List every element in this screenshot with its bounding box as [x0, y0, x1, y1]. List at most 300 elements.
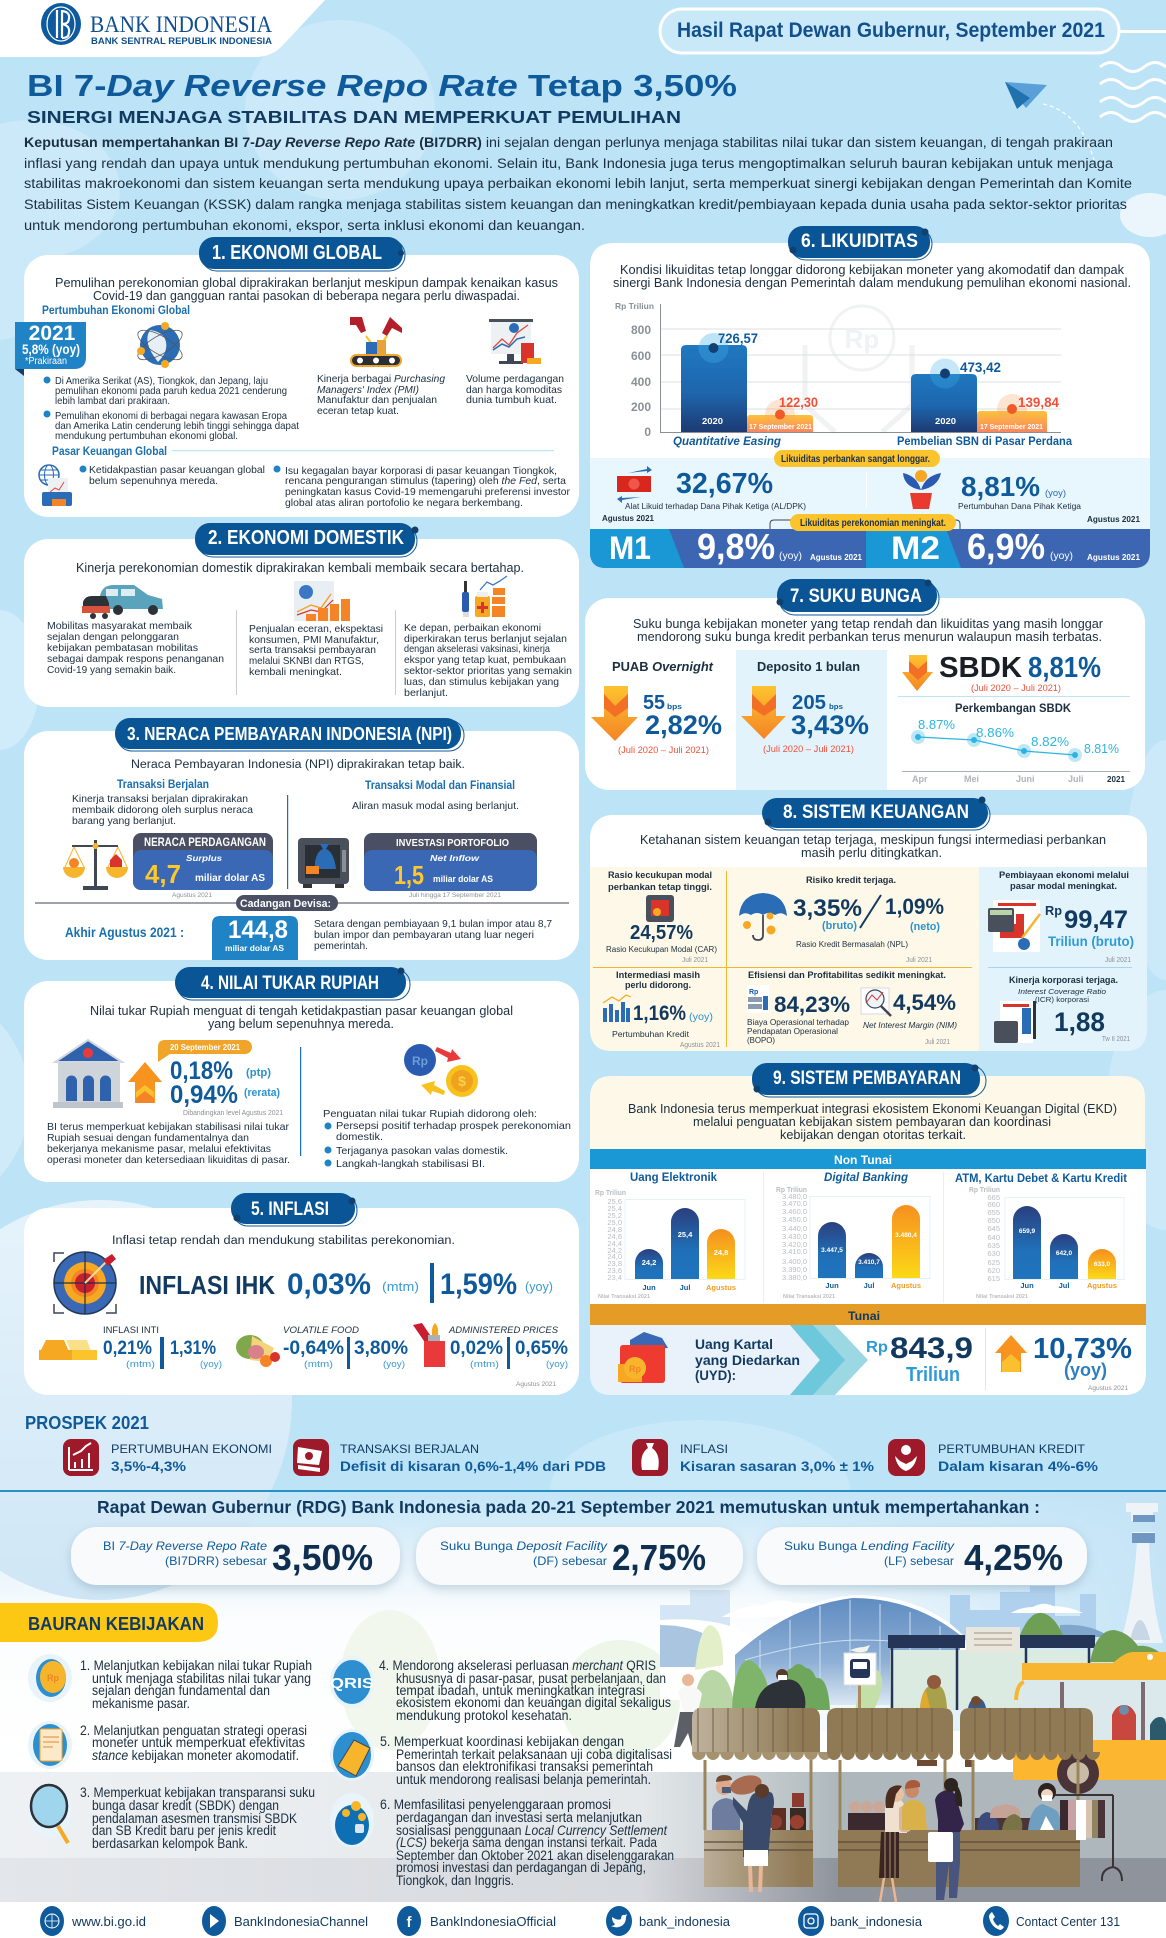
band: M1 M2: 9,8% — [697, 526, 775, 567]
text: stabilization: bekerjanya mekanisme pasar, melalui efektivitas — [47, 1143, 271, 1155]
text: intro NPI: Neraca Pembayaran Indonesia (NPI) diprakirakan tetap baik. — [131, 759, 465, 771]
line chart: SBDK: Mei — [964, 774, 979, 784]
stat: SBDK: (Juli 2020 – Juli 2021) — [971, 683, 1061, 694]
footer — [0, 1902, 1166, 1938]
policy 5: untuk mendorong realisasi belanja pemerintah. — [396, 1772, 651, 1787]
text: stabilization: operasi moneter dan ketersediaan likuiditas di pasar. — [47, 1154, 290, 1166]
card: Investasi Portofolio: Juli hingga 17 September 2021 — [409, 892, 501, 899]
band: Uang Kartal yang Diedarkan: yang Diedarkan — [695, 1353, 800, 1368]
policy 2: stance kebijakan moneter akomodatif. — [92, 1748, 299, 1763]
stat: NPL: Juli 2021 — [906, 957, 932, 964]
text: financial market bullet 2 — [274, 465, 570, 509]
card: Deposit Facility — [416, 1527, 743, 1585]
item: Pertumbuhan Ekonomi: 3,5%-4,3% — [111, 1458, 187, 1474]
text: intro interest rate: mendorong suku bunga kredit perbankan terus menurun walaupun masih terbatas. — [637, 630, 1102, 644]
icon: wallet — [618, 1332, 668, 1383]
band: M1 M2: (yoy) — [779, 550, 802, 562]
stat: 0,18% and 0,94%: Dibandingkan level Agustus 2021 — [183, 1110, 283, 1117]
policy 1: 1. Melanjutkan kebijakan nilai tukar Rupiah — [80, 1658, 312, 1673]
stat: Inflasi Inti: 0,21% — [103, 1338, 152, 1359]
column: Transaksi Modal dan Finansial: Transaksi Modal dan Finansial — [365, 780, 515, 792]
bar chart: Uang Elektronik: 24,2 — [642, 1258, 656, 1267]
text: reserves note: Setara dengan pembiayaan 9,1 bulan impor atau 8,7 — [314, 918, 552, 930]
stat: credit growth: (yoy) — [689, 1011, 713, 1023]
icon: retail chart — [294, 581, 350, 621]
text: intro financial system — [640, 833, 1106, 860]
text: intro liquidity: Kondisi likuiditas tetap longgar didorong kebijakan moneter yang akomodatif dan dampak — [620, 263, 1125, 277]
policy 3: bunga dasar kredit (SBDK) dengan — [92, 1798, 279, 1813]
text: rupiah drivers: Langkah-langkah stabilisasi BI. — [336, 1158, 485, 1170]
bar chart: Uang Elektronik: 23,4 — [607, 1273, 622, 1282]
policy 6: Tiongkok, dan Inggris. — [396, 1873, 514, 1888]
icon: target — [54, 1252, 116, 1314]
text: PMI: eceran tetap kuat. — [317, 405, 399, 417]
stat: CAR: Rasio Kecukupan Modal (CAR) — [606, 945, 717, 954]
bar chart: Digital Banking — [776, 1172, 930, 1300]
tag: 20 September 2021 — [158, 1040, 252, 1062]
bar chart: Digital Banking: 3.440,0 — [782, 1224, 807, 1233]
policy 6: 6. Memfasilitasi penyelenggaraan promosi — [380, 1797, 611, 1812]
column: Transaksi Berjalan: membaik didorong oleh surplus neraca — [72, 804, 253, 816]
heading: Bauran Kebijakan — [0, 1603, 218, 1642]
text: intro global: Covid-19 dan gangguan rantai pasokan di beberapa negara perlu diwaspadai. — [93, 288, 520, 303]
text: global growth bullets: lebih lambat dari prakiraan. — [55, 395, 170, 407]
bar chart: ATM, Kartu Debet dan Kartu Kredit: 665 — [987, 1193, 1000, 1202]
heading: Bauran Kebijakan: BAURAN KEBIJAKAN — [28, 1613, 204, 1634]
icon: clipboard — [28, 1721, 72, 1769]
stat: Inflasi Inti: (mtm) — [126, 1359, 155, 1369]
text: global growth bullets: Di Amerika Serikat (AS), Tiongkok, dan Jepang, laju — [55, 375, 268, 387]
stat: Deposito 1 bulan: 3,43% — [791, 710, 869, 740]
bar chart: ATM, Kartu Debet dan Kartu Kredit: Agustus — [1087, 1281, 1117, 1290]
stat: 8,81%: Agustus 2021 — [1087, 514, 1140, 524]
icon: promotion wallet — [330, 1793, 374, 1847]
stat: 32,67%: Alat Likuid terhadap Dana Pihak Ketiga (AL/DPK) — [625, 502, 806, 511]
heading: 4. Nilai Tukar Rupiah: 4. NILAI TUKAR RUPIAH — [201, 973, 379, 994]
bar chart: Digital Banking: 3.410,7 — [858, 1259, 880, 1266]
bar chart: ATM, Kartu Debet dan Kartu Kredit: 642,0 — [1056, 1250, 1073, 1257]
bar chart: Uang Elektronik: 25,6 — [607, 1197, 622, 1206]
policy 5: 5. Memperkuat koordinasi kebijakan dengan — [380, 1734, 624, 1749]
bar chart: ATM, Kartu Debet dan Kartu Kredit: 659,9 — [1019, 1228, 1036, 1235]
band: M1 M2: M1 — [609, 530, 651, 566]
text: rupiah drivers — [323, 1108, 571, 1170]
policy 1 — [28, 1654, 312, 1711]
stat: Deposito 1 bulan — [741, 660, 869, 755]
illustration: passers-by — [674, 1669, 986, 1767]
line chart: SBDK: 8.86% — [976, 726, 1014, 740]
item: Inflasi — [632, 1439, 875, 1476]
text: intro inflation: Inflasi tetap rendah dan mendukung stabilitas perekonomian. — [112, 1235, 455, 1247]
bar chart: ATM, Kartu Debet dan Kartu Kredit: 650 — [987, 1216, 1000, 1225]
bar chart: Uang Elektronik: 24,2 — [607, 1246, 622, 1255]
intro paragraph: Keputusan mempertahankan BI 7- Day Reverse Repo Rate (BI7DRR) ini sejalan dengan perlunya menjaga stabilitas nilai tukar dan sistem keuangan, di tengah prakiraan — [24, 135, 1113, 150]
tag: 2021 growth: 2021 — [29, 322, 76, 345]
panel: 6. Likuiditas — [590, 226, 1150, 568]
label: Cadangan Devisa: Cadangan Devisa: — [240, 898, 331, 910]
bar chart: Digital Banking: 3.480,0 — [782, 1192, 807, 1201]
heading: 8. Sistem Keuangan — [762, 796, 990, 830]
panel: 3. Neraca Pembayaran Indonesia — [24, 718, 579, 960]
band: bank liquidity — [590, 450, 1150, 530]
stat: Administered Prices — [448, 1325, 568, 1388]
card: 144,8 reserves — [212, 916, 298, 960]
panel: 1. Ekonomi Global — [15, 237, 579, 517]
policy 6 — [330, 1793, 674, 1888]
stat: PUAB Overnight: 2,82% — [645, 710, 722, 740]
illustration: bus — [1013, 1652, 1166, 1794]
icon: rupiah coin: Rp — [47, 1673, 59, 1683]
icon: bus stop sign — [844, 1645, 876, 1710]
card: Lending Facility — [757, 1527, 1087, 1585]
text: global growth bullets — [44, 375, 299, 442]
stat: NPL: (bruto) — [822, 920, 857, 932]
text: retail sales — [236, 610, 383, 695]
text: PMI: Manufaktur dan penjualan — [317, 394, 437, 406]
stat: efficiency and profitability — [747, 970, 957, 1046]
policy 6: September dan Oktober 2021 akan diselenggarakan — [396, 1848, 674, 1863]
card: Deposit Facility: 2,75% — [612, 1537, 706, 1578]
stat: Administered Prices: 0,02% — [450, 1338, 503, 1359]
text: PMI — [317, 373, 445, 417]
bar chart: Uang Elektronik — [595, 1172, 745, 1300]
bar chart: Digital Banking: Nilai Transaksi 2021 — [783, 1294, 835, 1300]
icon: gold bars — [39, 1340, 97, 1360]
text: rupiah drivers: domestik. — [336, 1131, 383, 1143]
bar chart: liquidity: Quantitative Easing — [673, 436, 781, 448]
stat: efficiency and profitability: Biaya Operasional terhadap — [747, 1018, 850, 1027]
bar chart: Uang Elektronik: 23,8 — [607, 1259, 622, 1268]
stat: Volatile Food: -0,64% — [283, 1338, 344, 1359]
text: global growth bullets: pemulihan ekonomi pada paruh kedua 2021 cenderung — [55, 385, 287, 397]
panel: 5. Inflasi — [24, 1193, 579, 1395]
item: Pertumbuhan Kredit: Dalam kisaran 4%-6% — [938, 1458, 1099, 1474]
item: Pertumbuhan Kredit — [888, 1439, 1099, 1476]
stat: 0,18% and 0,94%: 0,94% — [170, 1081, 238, 1109]
policy 6: sosialisasi penggunaan Local Currency Settlement — [396, 1823, 668, 1838]
icon: wallet: Rp — [629, 1364, 641, 1374]
illustration: skyline — [660, 1503, 1163, 1643]
bar: Tunai: Tunai — [848, 1311, 880, 1323]
policy 5 — [330, 1729, 672, 1787]
stat: 8,81% — [958, 471, 1140, 524]
stat: 0,18% and 0,94%: (rerata) — [244, 1087, 280, 1099]
card: Investasi Portofolio: 1,5 — [394, 860, 424, 890]
intro paragraph: inflasi yang rendah dan upaya untuk mendukung pertumbuhan ekonomi. Selain itu, Bank Indonesia juga terus mengoptimalkan seluruh bauran kebijakan untuk menjaga — [24, 156, 1114, 171]
item: Inflasi: INFLASI — [680, 1444, 728, 1456]
text: global growth bullets: mendukung pertumbuhan ekonomi global. — [55, 430, 238, 442]
text: intro exchange rate — [90, 1004, 513, 1031]
text: outlook domestic: diperkirakan terus berlanjut sejalan — [404, 633, 567, 645]
heading: 5. Inflasi — [231, 1193, 357, 1226]
icon: arrow up — [128, 1062, 162, 1103]
text: intro interest rate — [633, 617, 1103, 644]
stat: CAR: perbankan tetap tinggi. — [608, 882, 712, 893]
contact: YouTube — [202, 1906, 368, 1936]
text: rupiah drivers: Penguatan nilai tukar Rupiah didorong oleh: — [323, 1108, 537, 1120]
text: rupiah drivers: Terjaganya pasokan valas domestik. — [336, 1145, 508, 1157]
text: reserves note: pemerintah. — [314, 940, 368, 952]
heading: 8. Sistem Keuangan: 8. SISTEM KEUANGAN — [783, 802, 969, 823]
card: Neraca Perdagangan: miliar dolar AS — [195, 873, 265, 884]
stat: Inflasi Inti — [103, 1325, 222, 1369]
stat: ICR: Interest Coverage Ratio — [1018, 987, 1106, 996]
stat: Volatile Food — [283, 1325, 408, 1369]
illustration: city and market — [340, 1503, 1166, 1902]
stat: Inflasi IHK: (yoy) — [525, 1279, 553, 1294]
policy 4: ekosistem ekonomi dan keuangan digital sekaligus — [396, 1695, 671, 1710]
policy 6: (LCS) bekerja sama dengan instansi terkait. Pada — [396, 1835, 657, 1850]
stat: SBDK — [902, 652, 1101, 694]
policy 1: mekanisme pasar. — [92, 1696, 190, 1711]
icon: bank building — [53, 1040, 123, 1108]
card: Investasi Portofolio: miliar dolar AS — [433, 874, 493, 884]
policy 3: 3. Memperkuat kebijakan transparansi suku — [80, 1785, 315, 1800]
bar chart: ATM, Kartu Debet dan Kartu Kredit: ATM, Kartu Debet & Kartu Kredit — [955, 1173, 1127, 1185]
icon: trade chart — [489, 319, 541, 364]
text: mobility: Covid-19 yang semakin baik. — [47, 664, 176, 676]
stat: PUAB Overnight — [591, 660, 722, 756]
stat: 8,81%: (yoy) — [1045, 488, 1066, 499]
card: BI7DRR: (BI7DRR) sebesar — [165, 1554, 267, 1568]
text: outlook domestic — [395, 610, 572, 699]
stat: Inflasi IHK — [139, 1263, 553, 1303]
text: intro exchange rate: yang belum sepenuhnya mereda. — [208, 1017, 394, 1031]
icon: plant — [903, 470, 941, 509]
icon: globe — [134, 322, 186, 368]
icon: safe — [298, 838, 349, 888]
stat: efficiency and profitability: 84,23% — [774, 992, 850, 1017]
stat: Inflasi Inti: (yoy) — [200, 1359, 222, 1369]
stat: Administered Prices: (yoy) — [546, 1359, 568, 1369]
text: retail sales: Penjualan eceran, ekspektasi — [249, 623, 383, 635]
stat: efficiency and profitability: Efisiensi dan Profitabilitas sedikit meningkat. — [748, 970, 946, 981]
text: intro exchange rate: Nilai tukar Rupiah menguat di tengah ketidakpastian pasar keuangan global — [90, 1004, 513, 1018]
bar chart: liquidity: Rp — [845, 324, 879, 354]
text: reserves note — [314, 918, 552, 952]
bar chart: ATM, Kartu Debet dan Kartu Kredit: Rp Triliun — [969, 1187, 1000, 1194]
text: mobility: sejalan dengan pelonggaran — [47, 631, 179, 643]
icon: arrow up — [995, 1335, 1027, 1372]
policy 3: dan SB Kredit baru per jenis kredit — [92, 1823, 276, 1838]
text: intro liquidity: sinergi Bank Indonesia dengan Pemerintah dalam mendukung pemulihan ekonomi nasional. — [613, 276, 1131, 290]
bar chart: liquidity: 122,30 — [779, 394, 818, 410]
line chart: SBDK: Juli — [1068, 774, 1084, 784]
illustration: awning — [692, 1708, 1100, 1830]
stat: capital market financing: Pembiayaan ekonomi melalui — [999, 870, 1129, 881]
policy 3 — [28, 1785, 315, 1851]
text: trade volume: dunia tumbuh kuat. — [466, 394, 557, 406]
subtitle: SINERGI MENJAGA STABILITAS DAN MEMPERKUAT PEMULIHAN — [27, 107, 681, 127]
panel: 4. Nilai Tukar Rupiah — [24, 967, 579, 1182]
stat: Administered Prices: (mtm) — [470, 1359, 499, 1369]
contact: Twitter: bank_indonesia — [639, 1914, 731, 1929]
line chart: SBDK: 8.81% — [1084, 742, 1119, 756]
panel: 2. Ekonomi Domestik — [24, 523, 579, 707]
line chart: SBDK: Juni — [1016, 774, 1035, 784]
bar chart: Digital Banking: Rp Triliun — [776, 1187, 807, 1194]
bar chart: Uang Elektronik: 24,8 — [714, 1248, 728, 1257]
card: Investasi Portofolio: INVESTASI PORTOFOLIO — [396, 837, 509, 849]
icon: paper plane — [1005, 82, 1094, 160]
icon: rupiah dollar exchange: $ — [458, 1073, 466, 1089]
illustration: trees — [693, 1613, 1166, 1710]
text: intro payment system: kebijakan dengan otoritas terkait. — [780, 1128, 966, 1142]
label: Likuiditas perbankan sangat longgar — [774, 450, 940, 467]
policy 4 — [330, 1656, 671, 1723]
text: mobility: kebijakan pembatasan mobilitas — [47, 642, 198, 654]
stat: ICR: Tw II 2021 — [1102, 1036, 1130, 1043]
bar chart: liquidity: 200 — [631, 400, 651, 414]
icon: EDC machine — [330, 1729, 374, 1781]
policy 6: promosi investasi dan perdagangan di Jepang, — [396, 1860, 646, 1875]
policy 3: pendalaman asesmen transmisi SBDK — [92, 1811, 297, 1826]
item: Transaksi Berjalan: TRANSAKSI BERJALAN — [340, 1444, 479, 1456]
text: retail sales: kembali meningkat. — [249, 666, 342, 678]
column: Transaksi Berjalan: Transaksi Berjalan — [117, 779, 209, 791]
icon: money exchange — [617, 466, 652, 503]
bar chart: Uang Elektronik: 23,6 — [607, 1266, 622, 1275]
bar chart: liquidity: 800 — [631, 323, 651, 337]
stat: Deposito 1 bulan: Deposito 1 bulan — [757, 660, 860, 674]
card: BI7DRR — [71, 1527, 400, 1585]
card: Lending Facility: (LF) sebesar — [884, 1554, 954, 1568]
card: Neraca Perdagangan: NERACA PERDAGANGAN — [144, 837, 266, 849]
bar chart: Digital Banking: 3.430,0 — [782, 1232, 807, 1241]
icon: rupiah dollar exchange: Rp — [412, 1054, 428, 1068]
panel: 7. Suku Bunga — [585, 579, 1145, 790]
text: reserves note: bulan impor dan pembayaran utang luar negeri — [314, 929, 534, 941]
stat: efficiency and profitability: (BOPO) — [747, 1036, 775, 1045]
icon: financial globe — [39, 465, 72, 506]
bar chart: Digital Banking: Agustus — [891, 1281, 921, 1290]
card: Neraca Perdagangan — [133, 833, 273, 899]
intro paragraph: stabilitas makroekonomi dan sistem keuangan serta mendukung upaya perbaikan ekonomi lebih lanjut, serta memperkuat sinergi kebijakan dengan Pemerintah dan Komite — [24, 176, 1132, 191]
stat: Inflasi Inti: 1,31% — [170, 1338, 216, 1359]
subheading: Pertumbuhan Ekonomi Global: Pertumbuhan Ekonomi Global — [42, 303, 190, 317]
stat: 0,18% and 0,94%: (ptp) — [246, 1067, 271, 1079]
bar chart: Uang Elektronik: Jul — [680, 1283, 690, 1292]
heading: 9. Sistem Pembayaran — [752, 1063, 986, 1097]
bar chart: Uang Elektronik: Uang Elektronik — [630, 1172, 718, 1184]
stat: 10,73%: Agustus 2021 — [1088, 1385, 1128, 1392]
contact: Facebook: BankIndonesiaOfficial — [430, 1914, 556, 1929]
stat: NPL: (neto) — [910, 921, 940, 933]
bar chart: Digital Banking: 3.470,0 — [782, 1199, 807, 1208]
card: Neraca Perdagangan: Surplus — [186, 853, 222, 863]
bar chart: Digital Banking: 3.460,0 — [782, 1207, 807, 1216]
column: Transaksi Berjalan: Kinerja transaksi berjalan diprakirakan — [72, 793, 248, 805]
stat: CAR — [606, 870, 717, 964]
stat: Volatile Food: (mtm) — [304, 1359, 333, 1369]
band: M1 M2: (yoy) — [1050, 550, 1073, 562]
text: intro payment system: melalui penguatan kebijakan sistem pembayaran dan koordinasi — [693, 1115, 1051, 1129]
stat: CAR: Rasio kecukupan modal — [608, 870, 712, 881]
column: Transaksi Modal dan Finansial: Aliran masuk modal asing berlanjut. — [352, 800, 519, 812]
intro paragraph: Stabilitas Sistem Keuangan (KSSK) dalam rangka menjaga stabilitas sistem keuangan dan meningkatkan kredit/pembiayaan kepada dunia usaha pada sektor-sektor prioritas — [24, 197, 1127, 212]
card: 144,8 reserves: 144,8 — [228, 916, 288, 944]
bar chart: ATM, Kartu Debet dan Kartu Kredit: 660 — [987, 1200, 1000, 1209]
text: rupiah drivers: Persepsi positif terhadap prospek perekonomian — [336, 1120, 571, 1132]
bar chart: Uang Elektronik: 24,0 — [607, 1252, 622, 1261]
contact: Contact Center — [983, 1906, 1120, 1936]
text: trade volume: dan harga komoditas — [466, 384, 562, 396]
line chart: SBDK — [902, 703, 1130, 784]
stat: Inflasi IHK: 0,03% — [287, 1268, 371, 1301]
text: global growth bullets: dan Amerika Latin cenderung lebih tinggi sehingga dapat — [55, 420, 299, 432]
icon: scales — [63, 840, 128, 890]
band: Uang Kartal yang Diedarkan: (UYD): — [695, 1368, 736, 1383]
bar chart: Digital Banking: 3.447,5 — [821, 1247, 843, 1254]
contact: Instagram — [798, 1906, 923, 1936]
stat: capital market financing — [988, 870, 1134, 964]
stat: credit growth: Intermediasi masih — [616, 970, 700, 981]
heading: 3. NPI: 3. NERACA PEMBAYARAN INDONESIA (NPI) — [127, 724, 452, 744]
subheading: Pasar Keuangan Global: Pasar Keuangan Global — [52, 444, 167, 458]
text: financial market bullet 2: rencana pengurangan stimulus (tapering) oleh the Fed, serta — [285, 475, 566, 487]
illustration: shelter — [888, 1627, 1095, 1710]
contact: Instagram: bank_indonesia — [830, 1914, 923, 1929]
line chart: SBDK: 8.82% — [1031, 735, 1069, 749]
column: Transaksi Modal dan Finansial — [352, 780, 519, 812]
stat: Inflasi Inti: INFLASI INTI — [103, 1325, 159, 1335]
stat: Volatile Food: (yoy) — [383, 1359, 405, 1369]
text: financial market bullet 2: global atas aliran portofolio ke negara berkembang. — [285, 497, 523, 509]
card: Investasi Portofolio — [364, 833, 537, 899]
heading: 7. Suku Bunga — [776, 579, 939, 615]
bar chart: Uang Elektronik: 25,4 — [607, 1204, 622, 1213]
band: Uang Kartal yang Diedarkan — [590, 1325, 1146, 1395]
contact: website — [40, 1906, 146, 1936]
bar chart: liquidity: 0 — [644, 425, 651, 439]
stat: ICR: Kinerja korporasi terjaga. — [1009, 975, 1118, 986]
card: BI7DRR: BI 7-Day Reverse Repo Rate — [103, 1539, 267, 1553]
stat: 8,81%: 8,81% — [961, 471, 1040, 502]
tag: 2021 growth — [15, 322, 86, 376]
card: Lending Facility: 4,25% — [964, 1537, 1063, 1578]
column: Transaksi Berjalan: barang yang berlanjut. — [72, 815, 176, 827]
text: intro payment system — [628, 1102, 1117, 1142]
text: stabilization: Rupiah sesuai dengan fundamentalnya dan — [47, 1132, 249, 1144]
bar chart: Uang Elektronik: Agustus — [706, 1283, 736, 1292]
bar chart: Digital Banking: Jul — [864, 1281, 874, 1290]
policy 5: Pemerintah terkait pelaksanaan uji coba digitalisasi — [396, 1747, 672, 1762]
stat: Administered Prices: Agustus 2021 — [516, 1381, 556, 1388]
stat: credit growth: 1,16% — [633, 1002, 686, 1025]
policy 1: sejalan dengan fundamental dan — [92, 1683, 270, 1698]
stat: 843,9 Triliun — [866, 1332, 973, 1386]
stat: credit growth: perlu didorong. — [625, 980, 691, 991]
line chart: SBDK: 2021 — [1107, 774, 1125, 784]
illustration: terminal domes — [660, 1595, 1110, 1705]
heading: 5. Inflasi: 5. INFLASI — [251, 1199, 329, 1220]
item: Inflasi: Kisaran sasaran 3,0% ± 1% — [680, 1458, 875, 1474]
stat: capital market financing: Triliun (bruto) — [1048, 934, 1134, 949]
stat: Deposito 1 bulan: 205 — [792, 692, 826, 714]
stat: capital market financing: Rp — [1045, 903, 1062, 918]
text: PMI: Kinerja berbagai Purchasing — [317, 373, 445, 385]
stat: 0,18% and 0,94% — [170, 1057, 283, 1117]
line chart: SBDK: Perkembangan SBDK — [955, 703, 1072, 715]
decision statement: Rapat Dewan Gubernur (RDG) Bank Indonesia pada 20-21 September 2021 memutuskan untuk mempertahankan : — [97, 1497, 1040, 1517]
contact: Facebook — [397, 1906, 556, 1936]
bar chart: liquidity: 600 — [631, 349, 651, 363]
label: Likuiditas perbankan sangat longgar: Likuiditas perbankan sangat longgar. — [781, 454, 930, 465]
policy 2: moneter untuk memperkuat efektivitas — [92, 1735, 305, 1750]
label: Likuiditas perekonomian meningkat — [790, 514, 956, 531]
bar chart: Digital Banking: 3.380,0 — [782, 1273, 807, 1282]
bar chart: liquidity: 400 — [631, 375, 651, 389]
